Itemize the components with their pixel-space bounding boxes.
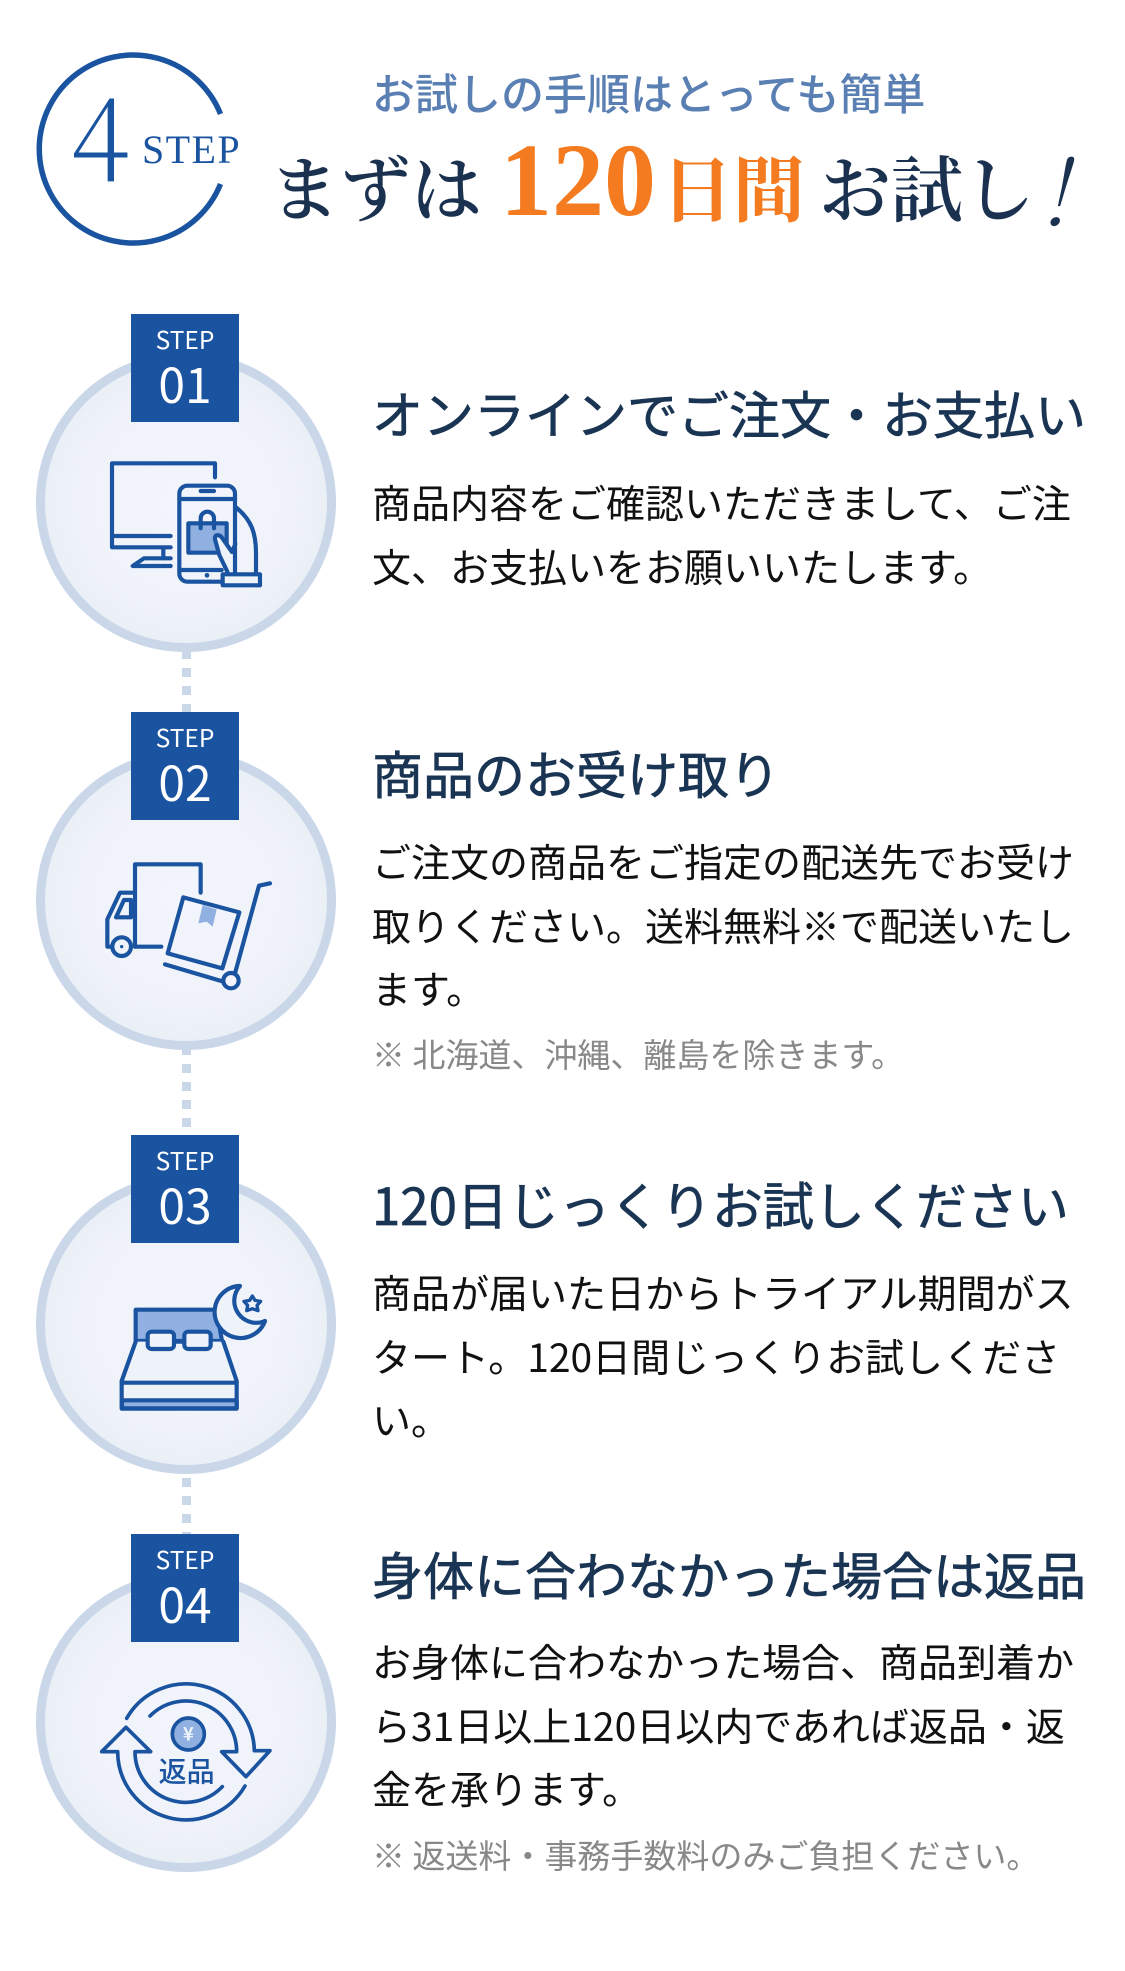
body text: タート。120日間じっくりお試しくださ [372,1328,1060,1384]
title: お試し [819,133,1035,237]
connector: step 3 to 4 [182,1478,191,1534]
body text: ら31日以上120日以内であれば返品・返 [372,1696,1065,1752]
icon: monitor and smartphone shopping [110,461,262,588]
step badge: STEP [156,720,214,755]
step badge: STEP [156,322,214,357]
step badge [131,314,239,422]
body text: ます。 [372,960,485,1016]
step badge: 02 [158,745,212,815]
heading: 120日じっくりお試しください [372,1166,1069,1240]
body text: 金を承ります。 [372,1760,641,1816]
icon: 4 step circle emblem: 4 [70,53,130,211]
body text [372,1264,1074,1447]
title: 日間 [661,133,805,237]
body text [372,1633,1074,1816]
body text: い。 [372,1391,450,1447]
body text: 文、お支払いをお願いいたします。 [372,538,992,594]
icon: return arrows with yen coin: 返品 [159,1750,215,1790]
step badge: STEP [156,1143,214,1178]
step badge: 01 [158,347,212,417]
panel: step 4 [36,1534,1086,1878]
circle background [36,1174,336,1474]
body text: お身体に合わなかった場合、商品到着か [372,1633,1074,1689]
circle background [36,1572,336,1872]
title: まずは [269,134,482,236]
icon: 4 step circle emblem: STEP [142,127,241,172]
body text [372,474,1071,594]
step badge [131,712,239,820]
step badge [131,1135,239,1243]
circle background [36,750,336,1050]
icon: return arrows with yen coin [100,1682,272,1822]
icon: bed with moon and star [120,1284,268,1411]
icon: truck and hand cart [105,862,272,990]
body text: ご注文の商品をご指定の配送先でお受け [372,833,1074,889]
step badge: STEP [156,1542,214,1577]
body text: 商品内容をご確認いただきまして、ご注 [372,474,1071,530]
step badge: 04 [158,1567,212,1637]
heading: 商品のお受け取り [372,735,780,809]
circle background [36,352,336,652]
body text [372,833,1074,1016]
panel: step 3 [36,1135,1074,1474]
body text: 商品が届いた日からトライアル期間がス [372,1264,1074,1320]
note: ※ 北海道、沖縄、離島を除きます。 [372,1029,904,1077]
subheading: お試しの手順はとっても簡単 [372,61,925,123]
header [36,52,1074,252]
note: ※ 返送料・事務手数料のみご負担ください。 [372,1830,1039,1878]
heading: 身体に合わなかった場合は返品 [372,1536,1086,1610]
icon: return arrows with yen coin: ¥ [183,1720,194,1747]
icon: 4 step circle emblem [36,52,241,246]
panel: step 2 [36,712,1074,1077]
title [269,120,1074,252]
title: ! [1041,120,1068,252]
connector: step 2 to 3 [182,1046,191,1135]
step badge: 03 [158,1168,212,1238]
connector: step 1 to 2 [182,650,191,712]
body text: 取りください。送料無料※で配送いたし [372,896,1074,952]
title: 120 [500,123,656,238]
step badge [131,1534,239,1642]
heading: オンラインでご注文・お支払い [372,375,1086,449]
panel: step 1 [36,314,1086,652]
